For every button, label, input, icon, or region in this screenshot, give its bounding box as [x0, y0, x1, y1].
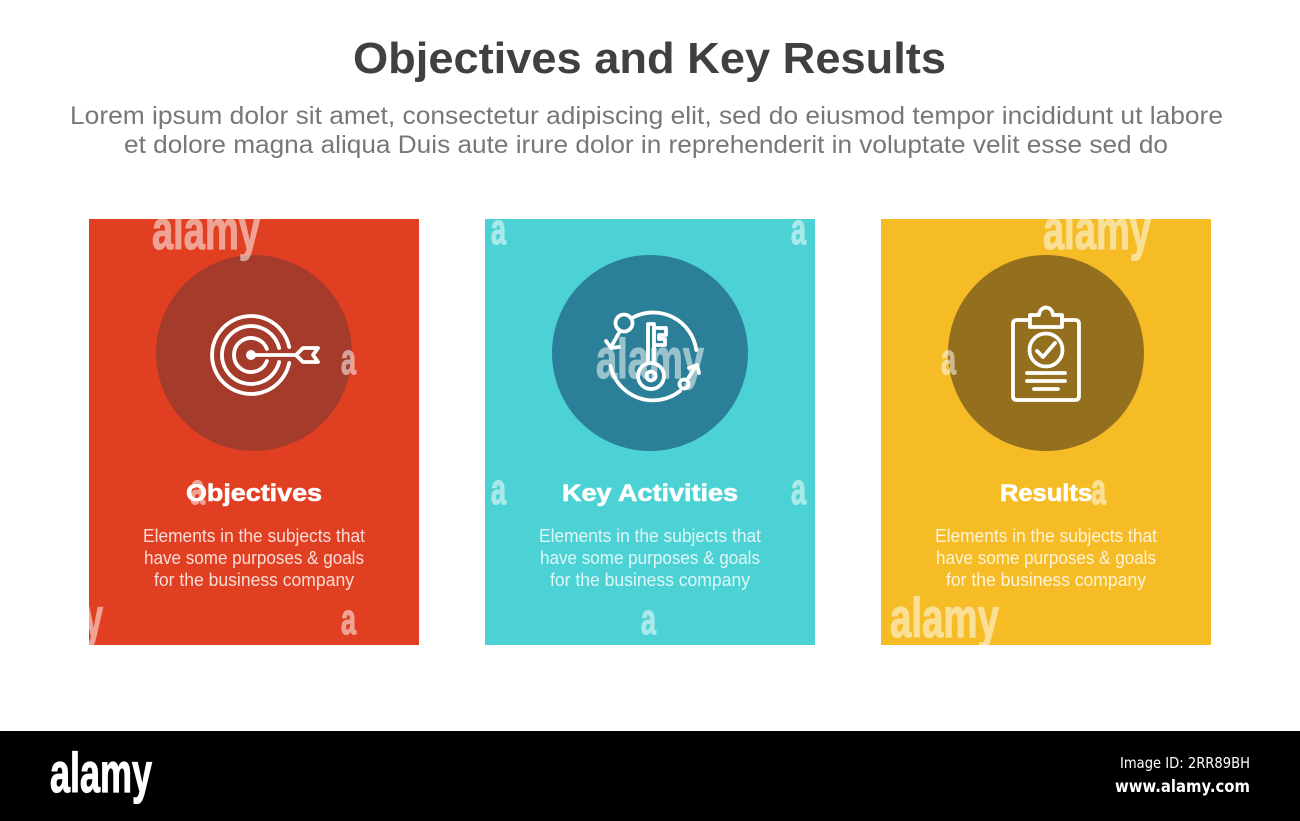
icon: key in cycle: [552, 255, 748, 451]
watermarks: a: [791, 465, 806, 514]
watermarks: a: [491, 205, 506, 254]
key activities heading: Key Activities: [562, 480, 738, 507]
intro text: et dolore magna aliqua Duis aute irure dolor in reprehenderit in voluptate velit esse sed do: [124, 131, 1168, 159]
watermarks: a: [941, 335, 956, 384]
watermarks: alamy: [890, 586, 999, 649]
website: www.alamy.com: [1115, 777, 1250, 797]
intro text: Lorem ipsum dolor sit amet, consectetur adipiscing elit, sed do eiusmod tempor incididunt ut labore: [70, 102, 1223, 130]
watermarks: a: [1091, 465, 1106, 514]
key activities description: for the business company: [550, 570, 750, 590]
objectives description: for the business company: [154, 570, 354, 590]
watermarks: y: [84, 586, 103, 649]
watermarks: a: [341, 595, 356, 644]
watermarks: alamy: [152, 198, 260, 261]
watermarks: a: [341, 335, 356, 384]
panel: key activities: [485, 219, 815, 645]
results heading: Results: [1000, 480, 1092, 507]
panel: results: [881, 219, 1211, 645]
key activities description: Elements in the subjects that: [539, 526, 761, 546]
watermarks: a: [791, 205, 806, 254]
icon: clipboard with check: [948, 255, 1144, 451]
key activities description: have some purposes & goals: [540, 548, 760, 568]
watermarks: alamy: [1043, 198, 1151, 261]
objectives heading: Objectives: [186, 480, 322, 507]
intro text: [70, 102, 1223, 159]
image id: Image ID: 2RR89BH: [1120, 754, 1250, 772]
watermarks: alamy: [596, 327, 704, 390]
icon: target with arrow: [156, 255, 352, 451]
watermarks: a: [491, 465, 506, 514]
objectives description: [143, 526, 365, 590]
watermarks: a: [641, 595, 656, 644]
title: Objectives and Key Results: [353, 34, 946, 83]
watermarks: a: [190, 465, 205, 514]
objectives description: Elements in the subjects that: [143, 526, 365, 546]
results description: for the business company: [946, 570, 1146, 590]
objectives description: have some purposes & goals: [144, 548, 364, 568]
key activities description: [539, 526, 761, 590]
watermarks: [84, 198, 1151, 649]
footer logo: alamy: [50, 741, 152, 804]
footer bar: [0, 731, 1300, 821]
results description: [935, 526, 1157, 590]
results description: have some purposes & goals: [936, 548, 1156, 568]
panel: objectives: [89, 219, 419, 645]
results description: Elements in the subjects that: [935, 526, 1157, 546]
